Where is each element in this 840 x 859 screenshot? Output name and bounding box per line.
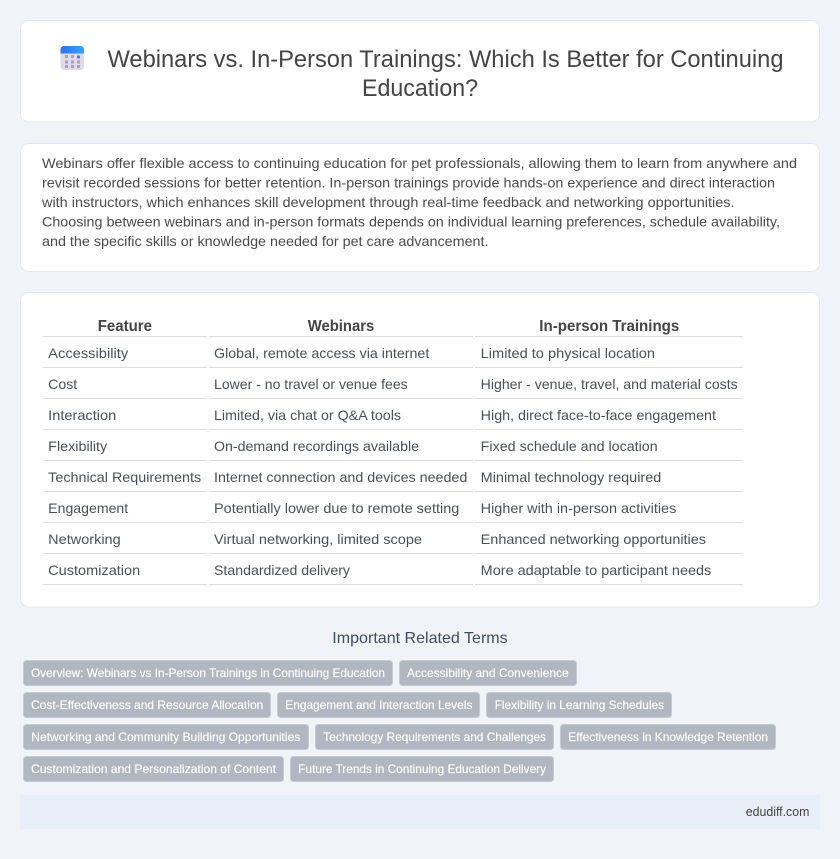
row: customization (48, 562, 711, 578)
row: customization: More adaptable to participant needs (481, 562, 711, 578)
tag: Networking and Community Building Opportunities (31, 730, 300, 744)
text block: summary: Webinars offer flexible access to continuing education for pet professionals, allowing them to learn from anywhere and (42, 155, 797, 171)
row: engagement: Potentially lower due to remote setting (214, 500, 459, 516)
row: accessibility: Limited to physical location (481, 345, 655, 361)
title: Education? (362, 75, 478, 102)
row: cost: Cost (48, 376, 77, 392)
tag: Customization and Personalization of Content (31, 762, 277, 776)
table header: Webinars (308, 318, 374, 335)
tag: Flexibility in Learning Schedules (495, 698, 664, 712)
icon: calendar (60, 46, 84, 70)
title: Webinars vs. In-Person Trainings: Which Is Better for Continuing (108, 46, 784, 73)
row: networking: Virtual networking, limited scope (214, 531, 422, 547)
row: technical requirements: Minimal technology required (481, 469, 661, 485)
row: flexibility: Fixed schedule and location (481, 438, 658, 454)
table header (98, 318, 679, 335)
tag: Effectiveness in Knowledge Retention (568, 730, 768, 744)
row: networking: Networking (48, 531, 121, 547)
row: engagement (48, 500, 676, 516)
table header: In-person Trainings (539, 318, 679, 335)
tag (560, 724, 776, 750)
tag (316, 724, 554, 750)
panel: header (20, 20, 820, 122)
row: flexibility (48, 438, 658, 454)
tag: Overview: Webinars vs In-Person Trainings in Continuing Education (31, 666, 385, 680)
tag: Accessibility and Convenience (407, 666, 569, 680)
row: accessibility (48, 345, 655, 361)
tag (290, 756, 554, 782)
text block: summary: and the specific skills or knowledge needed for pet care advancement. (42, 233, 488, 249)
row: customization: Customization (48, 562, 140, 578)
tag (24, 692, 270, 718)
row: engagement: Engagement (48, 500, 128, 516)
tag: Cost-Effectiveness and Resource Allocation (31, 698, 263, 712)
row: flexibility: Flexibility (48, 438, 107, 454)
text block: summary: revisit recorded sessions for better retention. In-person trainings provide hands-on experience and direct interaction (42, 174, 775, 190)
row: technical requirements (48, 469, 661, 485)
tag (24, 756, 284, 782)
tag: Future Trends in Continuing Education Delivery (298, 762, 546, 776)
panel: related term tags (24, 660, 776, 782)
text block: summary (41, 155, 797, 249)
text block: summary: with instructors, which enhances skill development through real-time feedback and networking opportunities. (41, 194, 735, 210)
row: accessibility: Accessibility (48, 345, 128, 361)
row: cost: Higher - venue, travel, and material costs (481, 376, 738, 392)
row: cost (48, 376, 738, 392)
tag (486, 692, 672, 718)
row: engagement: Higher with in-person activities (481, 500, 676, 516)
title (108, 46, 784, 102)
row: customization: Standardized delivery (214, 562, 350, 578)
row: interaction (48, 407, 716, 423)
row: networking (48, 531, 706, 547)
tag (400, 660, 576, 686)
text block: summary: Choosing between webinars and in-person formats depends on individual learning preferences, schedule availability, (42, 214, 780, 230)
row: interaction: Interaction (48, 407, 116, 423)
row: cost: Lower - no travel or venue fees (214, 376, 408, 392)
row: interaction: Limited, via chat or Q&A tools (214, 407, 401, 423)
footer: edudiff.com (746, 804, 809, 819)
row: flexibility: On-demand recordings available (214, 438, 419, 454)
tag (24, 724, 308, 750)
panel: summary paragraph (20, 144, 820, 272)
footer (20, 795, 820, 829)
table header: Feature (98, 318, 152, 335)
panel: comparison table (20, 292, 820, 607)
tag: Technology Requirements and Challenges (323, 730, 546, 744)
row: networking: Enhanced networking opportunities (481, 531, 706, 547)
tag (278, 692, 480, 718)
row: technical requirements: Internet connection and devices needed (214, 469, 467, 485)
tag (24, 660, 392, 686)
row: technical requirements: Technical Requirements (48, 469, 201, 485)
tag: Engagement and Interaction Levels (285, 698, 472, 712)
row: interaction: High, direct face-to-face engagement (481, 407, 716, 423)
heading: related terms: Important Related Terms (332, 630, 508, 647)
row: accessibility: Global, remote access via internet (214, 345, 429, 361)
